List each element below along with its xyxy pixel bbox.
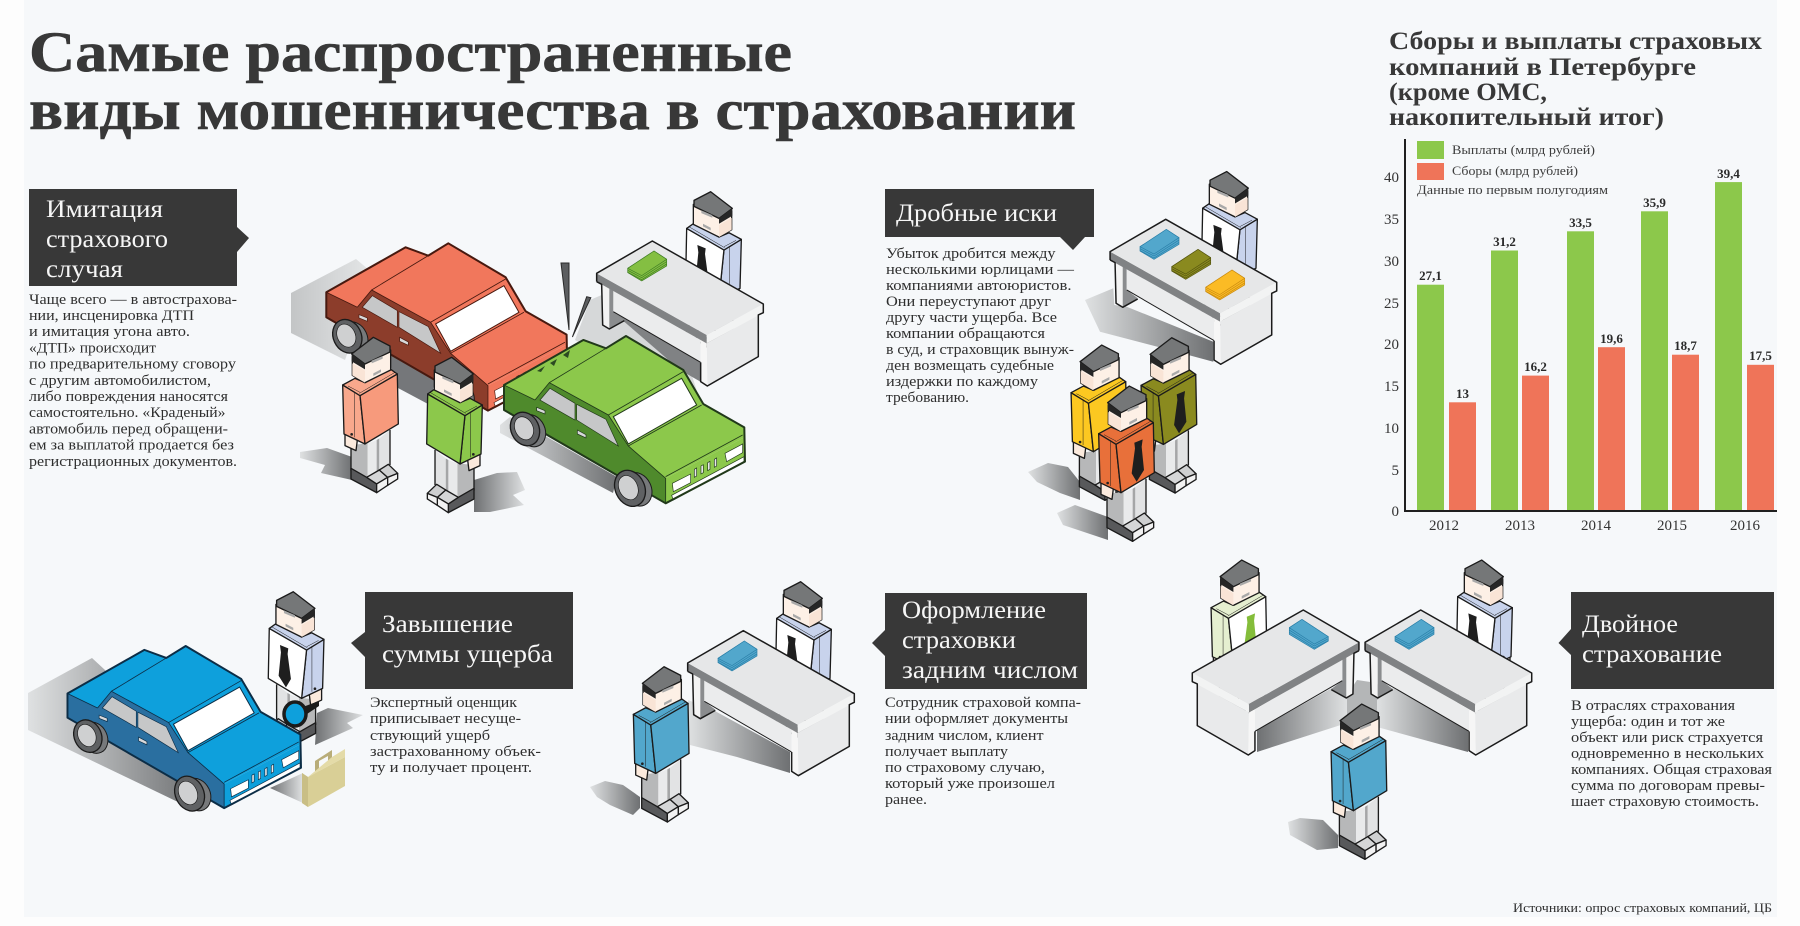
text block: завышение: ствующий ущерб (370, 728, 490, 744)
value labels: 17,5 (1749, 348, 1772, 363)
y axis labels: 15 (1384, 379, 1399, 395)
blue car (67, 646, 301, 816)
text block: оформление: задним числом, клиент (885, 728, 1044, 744)
stack of banknotes (628, 251, 667, 281)
blue stack (718, 641, 757, 671)
text block: оформление: нии оформляет документы (885, 711, 1068, 727)
value labels: 31,2 (1493, 234, 1516, 249)
illustration: staged car crash (291, 192, 763, 513)
text block: оформление: который уже произошел (885, 776, 1056, 792)
x axis labels: 2015 (1657, 518, 1687, 534)
clerk (1202, 172, 1257, 327)
text block: двойное (1571, 698, 1772, 810)
text block: оформление: по страховому случаю, (885, 760, 1045, 776)
heading box: Завышение суммы ущерба: суммы ущерба (382, 641, 553, 668)
bars: сборы (1449, 347, 1774, 511)
text block: завышение (370, 695, 541, 776)
olive stack (1172, 249, 1211, 279)
value labels: 19,6 (1600, 331, 1623, 346)
illustration: two clerks and one client (1192, 560, 1532, 859)
crash teeth (537, 350, 570, 372)
left blue stack (1289, 619, 1328, 649)
text block: дробные иски: Убыток дробится между (886, 246, 1056, 262)
heading box: Оформление страховки задним числом: страховки (902, 627, 1016, 654)
text block: дробные иски: издержки по каждому (886, 374, 1039, 390)
value labels: 16,2 (1524, 359, 1547, 374)
heading box: Завышение суммы ущерба (351, 592, 573, 689)
value labels: 33,5 (1569, 215, 1592, 230)
man in olive (1141, 338, 1197, 493)
heading box: Двойное страхование: страхование (1582, 641, 1722, 668)
panel: имитация страхового случая (29, 189, 763, 513)
shadows (28, 658, 363, 803)
x axis labels: 2012 (1429, 518, 1459, 534)
yellow stack (1206, 270, 1245, 300)
text block: дробные иски: другу части ущерба. Все (886, 310, 1057, 326)
text block: имитация: с другим автомобилистом, (29, 373, 211, 389)
shadows (1257, 680, 1468, 850)
legend (1417, 141, 1608, 197)
man in salmon shirt (343, 337, 398, 493)
text block: имитация: «ДТП» происходит (29, 340, 156, 356)
value labels: 35,9 (1643, 195, 1666, 210)
desk with money (597, 241, 763, 386)
chart title: (кроме ОМС, (1389, 79, 1547, 106)
axes (1405, 139, 1777, 511)
legend: Выплаты (млрд рублей) (1452, 142, 1595, 157)
shadows of cars and desk (291, 259, 701, 512)
panel: дробные иски (885, 172, 1277, 541)
text block: дробные иски: ден возмещать судебные (886, 358, 1054, 374)
y axis labels: 5 (1392, 463, 1399, 479)
text block: завышение: приписывает несуще- (370, 711, 521, 727)
value labels: 13 (1456, 386, 1470, 401)
y axis labels (1384, 170, 1399, 520)
man in yellow (1071, 345, 1127, 500)
heading box: Имитация страхового случая: страхового (46, 226, 168, 253)
heading box: Дробные иски (885, 189, 1094, 250)
right blue stack (1395, 619, 1434, 649)
shadows (590, 700, 790, 815)
y axis labels: 40 (1384, 170, 1399, 186)
x axis labels: 2016 (1730, 518, 1760, 534)
illustration: appraiser and blue car (28, 592, 363, 816)
blue stack (1140, 229, 1179, 259)
text block: оформление (885, 695, 1081, 808)
heading box: Имитация страхового случая (29, 189, 249, 286)
y axis labels: 10 (1384, 421, 1399, 437)
text block: оформление: ранее. (885, 792, 927, 808)
text block: завышение: застрахованному объек- (370, 744, 541, 760)
panel: завышение суммы ущерба (28, 592, 573, 816)
chart title: компаний в Петербурге (1389, 54, 1696, 81)
text block: дробные иски: компании обращаются (886, 326, 1045, 342)
heading box: Оформление страховки задним числом: задним числом (902, 657, 1078, 684)
right desk (1365, 610, 1532, 755)
left desk (1192, 610, 1359, 755)
desk (688, 631, 854, 776)
chart title: Сборы и выплаты страховых (1389, 28, 1763, 55)
right clerk (1457, 560, 1512, 715)
text block: имитация: автомобиль перед обращени- (29, 422, 228, 438)
text block: двойное: одновременно в нескольких (1571, 746, 1765, 762)
text block: завышение: Экспертный оценщик (370, 695, 518, 711)
left clerk (1211, 560, 1267, 715)
desk (1110, 219, 1277, 364)
heading box: Завышение суммы ущерба: Завышение (382, 611, 513, 638)
title: Самые распространенные (29, 21, 792, 84)
panel: оформление страховки задним числом (590, 582, 1087, 822)
magnifying glass (284, 701, 319, 726)
legend: Сборы (млрд рублей) (1452, 163, 1578, 178)
text block: оформление: Сотрудник страховой компа- (885, 695, 1081, 711)
client in blue (1331, 704, 1387, 859)
chart title: накопительный итог) (1389, 104, 1664, 131)
text block: имитация: Чаще всего — в автострахова- (29, 292, 237, 308)
y axis labels: 35 (1384, 212, 1399, 228)
text block: дробные иски: Они переуступают друг (886, 294, 1051, 310)
red car (326, 243, 567, 419)
source note: Источники: опрос страховых компаний, ЦБ (1513, 900, 1772, 915)
man behind desk (686, 192, 741, 347)
bar chart (1384, 139, 1777, 534)
text block: дробные иски: требованию. (886, 390, 969, 406)
text block: имитация: и имитация угона авто. (29, 324, 190, 340)
man in orange (1099, 386, 1154, 541)
green car (504, 336, 745, 511)
text block: двойное: В отраслях страхования (1571, 698, 1735, 714)
text block: двойное: ущерба: один и тот же (1571, 714, 1725, 730)
text block: оформление: получает выплату (885, 744, 1009, 760)
shadows (1028, 288, 1213, 540)
heading box: Оформление страховки задним числом: Оформление (902, 597, 1046, 624)
text block: имитация: нии, инсценировка ДТП (29, 308, 194, 324)
y axis labels: 20 (1384, 337, 1399, 353)
text block: завышение: ту и получает процент. (370, 760, 532, 776)
text block: дробные иски: несколькими юрлицами — (886, 262, 1075, 278)
y axis labels: 30 (1384, 254, 1399, 270)
y axis labels: 25 (1384, 296, 1399, 312)
briefcase (302, 749, 345, 807)
text block: дробные иски (886, 246, 1075, 406)
client in blue (633, 667, 689, 822)
text block: имитация: либо повреждения наносятся (29, 389, 228, 405)
x axis labels: 2013 (1505, 518, 1535, 534)
value labels: 39,4 (1717, 166, 1740, 181)
text block: двойное: шает страховую стоимость. (1571, 794, 1759, 810)
bars: выплаты (1417, 182, 1742, 511)
x axis labels: 2014 (1581, 518, 1612, 534)
title (29, 21, 1076, 142)
text block: имитация (29, 292, 237, 470)
text block: дробные иски: в суд, и страховщик вынуж- (886, 342, 1074, 358)
text block: имитация: ем за выплатой продается без (29, 438, 234, 454)
clerk (776, 582, 831, 737)
text block: имитация: самостоятельно. «Краденый» (29, 405, 226, 421)
text block: имитация: регистрационных документов. (29, 454, 237, 470)
heading box: Имитация страхового случая: Имитация (46, 196, 164, 223)
appraiser (268, 592, 324, 747)
illustration: clerk and client (590, 582, 854, 822)
title: виды мошенничества в страховании (29, 79, 1076, 142)
panel: двойное страхование (1192, 560, 1774, 859)
heading box: Оформление страховки задним числом (872, 593, 1087, 689)
illustration: clerk and three claimants (1028, 172, 1277, 541)
impact spikes (561, 263, 591, 337)
value labels: 27,1 (1419, 268, 1442, 283)
text block: дробные иски: компаниями автоюристов. (886, 278, 1072, 294)
value labels (1419, 166, 1772, 401)
legend: Данные по первым полугодиям (1417, 182, 1608, 197)
heading box: Имитация страхового случая: случая (46, 256, 124, 283)
text block: имитация: по предварительному сговору (29, 357, 237, 373)
heading box: Двойное страхование: Двойное (1582, 611, 1678, 638)
y axis labels: 0 (1392, 504, 1399, 520)
value labels: 18,7 (1674, 338, 1697, 353)
panel: chart (1384, 28, 1777, 534)
heading box: Двойное страхование (1558, 592, 1774, 689)
heading box: Дробные иски: Дробные иски (896, 200, 1057, 227)
text block: двойное: объект или риск страхуется (1571, 730, 1763, 746)
man in green shirt (427, 357, 482, 513)
text block: двойное: компаниях. Общая страховая (1571, 762, 1772, 778)
x axis labels (1429, 518, 1760, 534)
text block: двойное: сумма по договорам превы- (1571, 778, 1765, 794)
chart title (1389, 28, 1763, 131)
